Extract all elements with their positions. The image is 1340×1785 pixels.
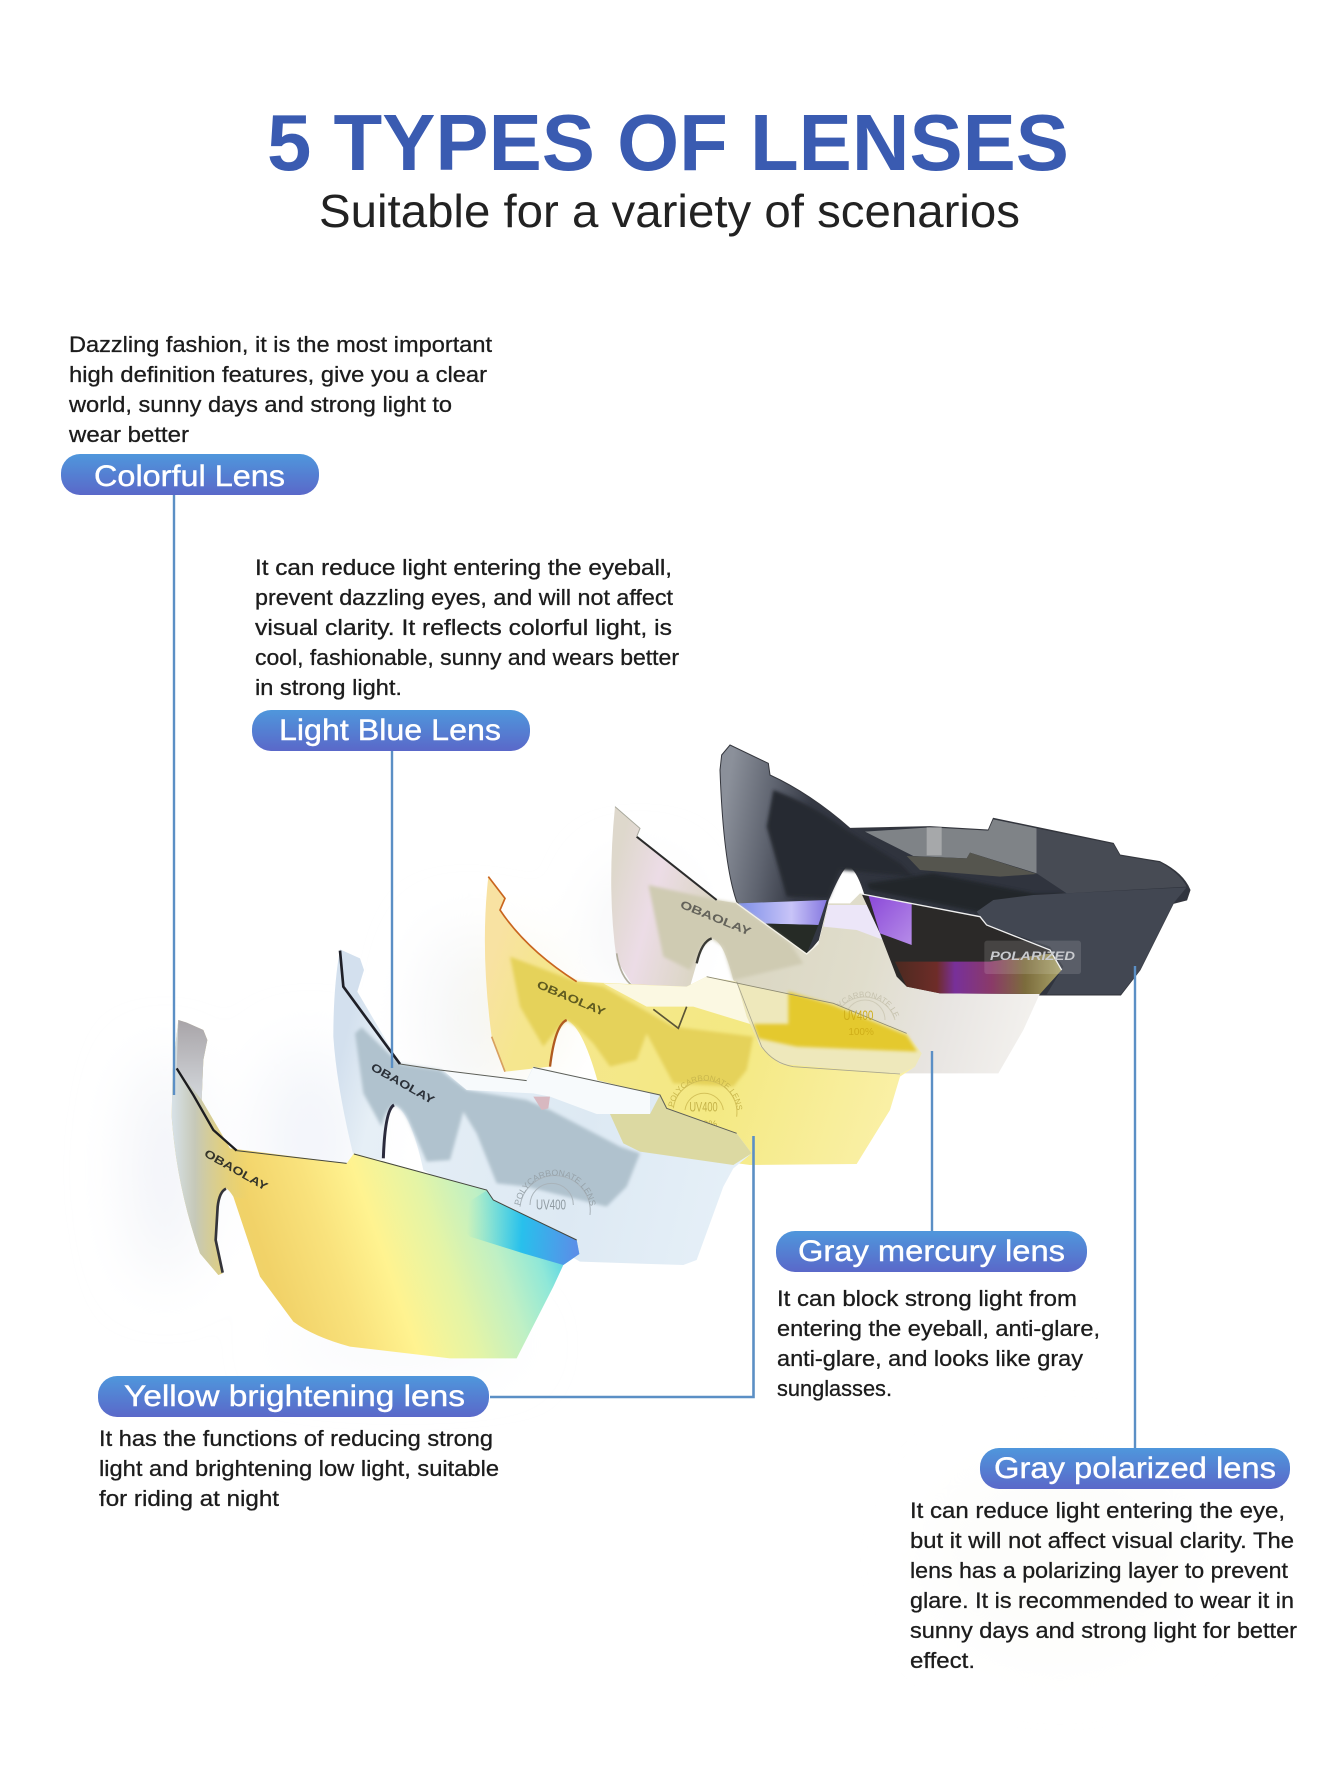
text: gray polarized lens description: It can reduce light entering the eye, xyxy=(910,1498,1285,1523)
text: colorful lens description: high definition features, give you a clear xyxy=(69,362,487,387)
text: colorful lens description: world, sunny days and strong light to xyxy=(68,392,452,417)
text: gray polarized lens description: sunny days and strong light for better xyxy=(910,1618,1297,1643)
text: yellow brightening lens description: for riding at night xyxy=(99,1486,279,1511)
leader line: gray mercury lens xyxy=(931,1051,933,1231)
leader line: yellow brightening lens xyxy=(490,1136,754,1397)
pill: yellow brightening lens: Yellow brightening lens xyxy=(124,1380,465,1413)
text: gray mercury lens description xyxy=(777,1286,1100,1401)
lens: gray polarized xyxy=(720,745,1190,995)
lens: light blue xyxy=(333,950,752,1265)
stamp on mercury tip xyxy=(843,1007,874,1038)
pill: colorful lens xyxy=(61,454,319,495)
text: colorful lens description xyxy=(68,332,492,447)
text: gray mercury lens description: It can block strong light from xyxy=(777,1286,1077,1311)
pill: light blue lens xyxy=(252,710,530,751)
pill: gray mercury lens xyxy=(776,1231,1087,1272)
leader line: light blue lens xyxy=(391,750,393,1068)
brand mark: OBAOLAY xyxy=(535,979,608,1019)
text: colorful lens description: wear better xyxy=(68,422,189,447)
leader line: colorful lens xyxy=(173,495,175,1095)
stamp on mercury tip: 100% xyxy=(848,1027,874,1038)
stamp on mercury tip: UV400 xyxy=(843,1007,873,1023)
pill: light blue lens: Light Blue Lens xyxy=(279,714,501,747)
text: yellow brightening lens description: light and brightening low light, suitable xyxy=(99,1456,499,1481)
soft studio shadows xyxy=(135,870,1190,1660)
text: light blue lens description: visual clarity. It reflects colorful light, is xyxy=(255,615,672,640)
text: gray polarized lens description xyxy=(910,1498,1297,1673)
text: gray mercury lens description: sunglasses. xyxy=(777,1376,892,1401)
tinted overlap over dark lens xyxy=(862,894,1062,994)
text: light blue lens description: prevent dazzling eyes, and will not affect xyxy=(255,585,673,610)
lens: gray mercury xyxy=(611,806,1081,1074)
brand mark: OBAOLAY xyxy=(369,1061,437,1107)
pill: gray mercury lens: Gray mercury lens xyxy=(798,1235,1065,1268)
text: gray polarized lens description: lens has a polarizing layer to prevent xyxy=(910,1558,1288,1583)
text: colorful lens description: Dazzling fashion, it is the most important xyxy=(69,332,492,357)
text: gray polarized lens description: but it will not affect visual clarity. The xyxy=(910,1528,1294,1553)
leader line: gray polarized lens xyxy=(1134,966,1136,1448)
text: gray polarized lens description: glare. It is recommended to wear it in xyxy=(910,1588,1294,1613)
text: light blue lens description: in strong light. xyxy=(255,675,402,700)
stamp: UV400 xyxy=(536,1197,566,1213)
stamp xyxy=(668,1075,742,1130)
text: light blue lens description: It can reduce light entering the eyeball, xyxy=(255,555,672,580)
pill: gray polarized lens: Gray polarized lens xyxy=(994,1452,1276,1485)
pill: colorful lens: Colorful Lens xyxy=(94,460,285,493)
stamp xyxy=(837,992,900,1020)
polarized mark: POLARIZED xyxy=(990,949,1075,963)
stamp: POLYCARBONATE LENS xyxy=(668,1075,742,1110)
subtitle: Suitable for a variety of scenarios xyxy=(319,185,1020,237)
text: light blue lens description xyxy=(255,555,679,700)
pill: gray polarized lens xyxy=(980,1448,1290,1489)
pill: yellow brightening lens xyxy=(98,1376,489,1417)
text: gray mercury lens description: anti-glare, and looks like gray xyxy=(777,1346,1083,1371)
lens: yellow brightening xyxy=(484,876,922,1165)
text: gray polarized lens description: effect. xyxy=(910,1648,975,1673)
stamp: UV400 xyxy=(689,1099,718,1115)
stamp: 100% xyxy=(692,1119,717,1130)
text: gray mercury lens description: entering the eyeball, anti-glare, xyxy=(777,1316,1100,1341)
title: 5 TYPES OF LENSES xyxy=(267,98,1069,187)
stamp: POLYCARBONATE LENS xyxy=(514,1170,596,1206)
brand mark: OBAOLAY xyxy=(678,899,753,939)
lens: colorful xyxy=(172,1020,579,1358)
polarized mark xyxy=(984,941,1081,974)
text: light blue lens description: cool, fashionable, sunny and wears better xyxy=(255,645,679,670)
text: yellow brightening lens description: It has the functions of reducing strong xyxy=(99,1426,493,1451)
text: yellow brightening lens description xyxy=(99,1426,499,1511)
brand mark: OBAOLAY xyxy=(202,1148,270,1194)
stamp: POLYCARBONATE LENS xyxy=(837,992,900,1018)
